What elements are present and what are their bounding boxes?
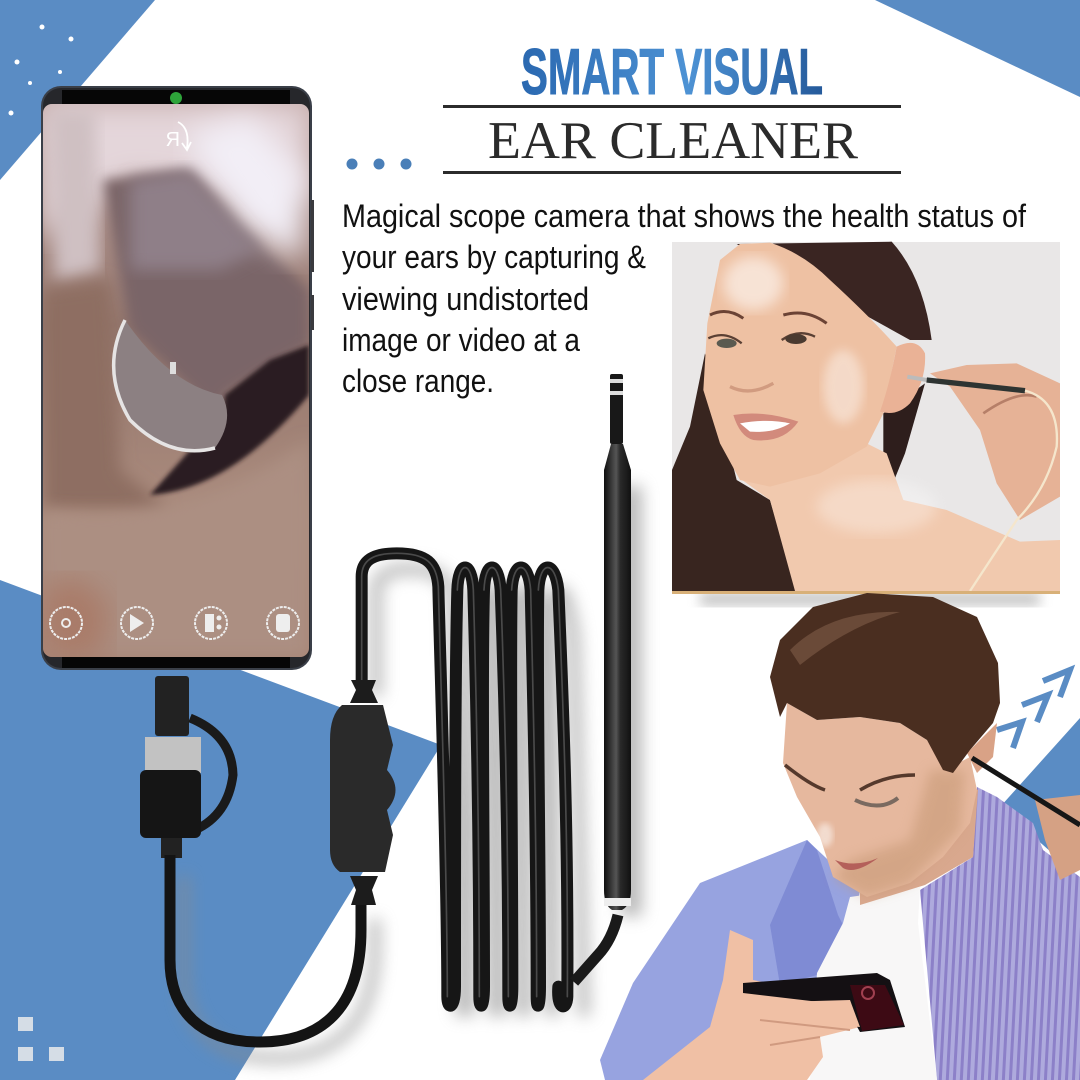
man ear: [967, 723, 997, 773]
title: ear cleaner: EAR CLEANER: [488, 112, 859, 170]
title rule top: [443, 105, 901, 108]
title: smart visual: SMART VISUAL: [521, 35, 823, 108]
arrows: [997, 670, 1070, 748]
cable and probe shadow: [184, 486, 631, 1058]
photo bottom edge: [672, 591, 1060, 594]
man hair: [770, 593, 1000, 773]
woman hair behind neck: [883, 383, 925, 481]
man hand with scope: [1035, 795, 1080, 880]
photo: woman using ear scope: [672, 242, 1060, 591]
man face: [783, 703, 977, 897]
man shirt left: [600, 840, 860, 1080]
camera app icons: [50, 607, 299, 639]
coiled cable: [362, 553, 567, 1006]
woman long hair: [672, 353, 797, 591]
photo shadow: [700, 592, 1040, 606]
decorative squares bottom-left: [18, 1017, 64, 1061]
description text: [342, 198, 1026, 399]
white cable: [970, 391, 1057, 591]
woman face: [703, 243, 897, 487]
man hand holding phone: [643, 930, 860, 1080]
mirrored R and arrow: R: [166, 129, 180, 151]
endoscope probe: [604, 374, 631, 910]
photo: man using phone: [600, 593, 1080, 1080]
woman ear: [880, 343, 925, 413]
description text: your ears by capturing &: [342, 239, 646, 275]
lower cable: [170, 855, 361, 1042]
title rule bottom: [443, 171, 901, 174]
phone: [41, 86, 314, 670]
three dots: [346, 158, 412, 170]
inline control switch: [330, 680, 396, 905]
usb adapter: [140, 676, 233, 858]
man shirt right: [920, 787, 1080, 1080]
decorative dots top-left: [8, 24, 74, 116]
man undershirt: [810, 887, 937, 1080]
description text: close range.: [342, 363, 494, 399]
eardrum bubble: [114, 320, 227, 451]
cable to probe: [574, 915, 618, 982]
man neck: [860, 780, 978, 905]
ear scope in hand: [907, 377, 927, 380]
man phone: [743, 973, 905, 1032]
camera indicator: [170, 92, 182, 104]
woman top hair: [737, 242, 932, 340]
side buttons: [311, 200, 314, 330]
phone screen: ear canal view: [43, 104, 309, 657]
description text: image or video at a: [342, 322, 580, 358]
description text: viewing undistorted: [342, 281, 589, 317]
woman hand: [930, 363, 1060, 520]
mirrored R and arrow: [166, 122, 191, 151]
woman neck and chest: [740, 443, 1060, 591]
